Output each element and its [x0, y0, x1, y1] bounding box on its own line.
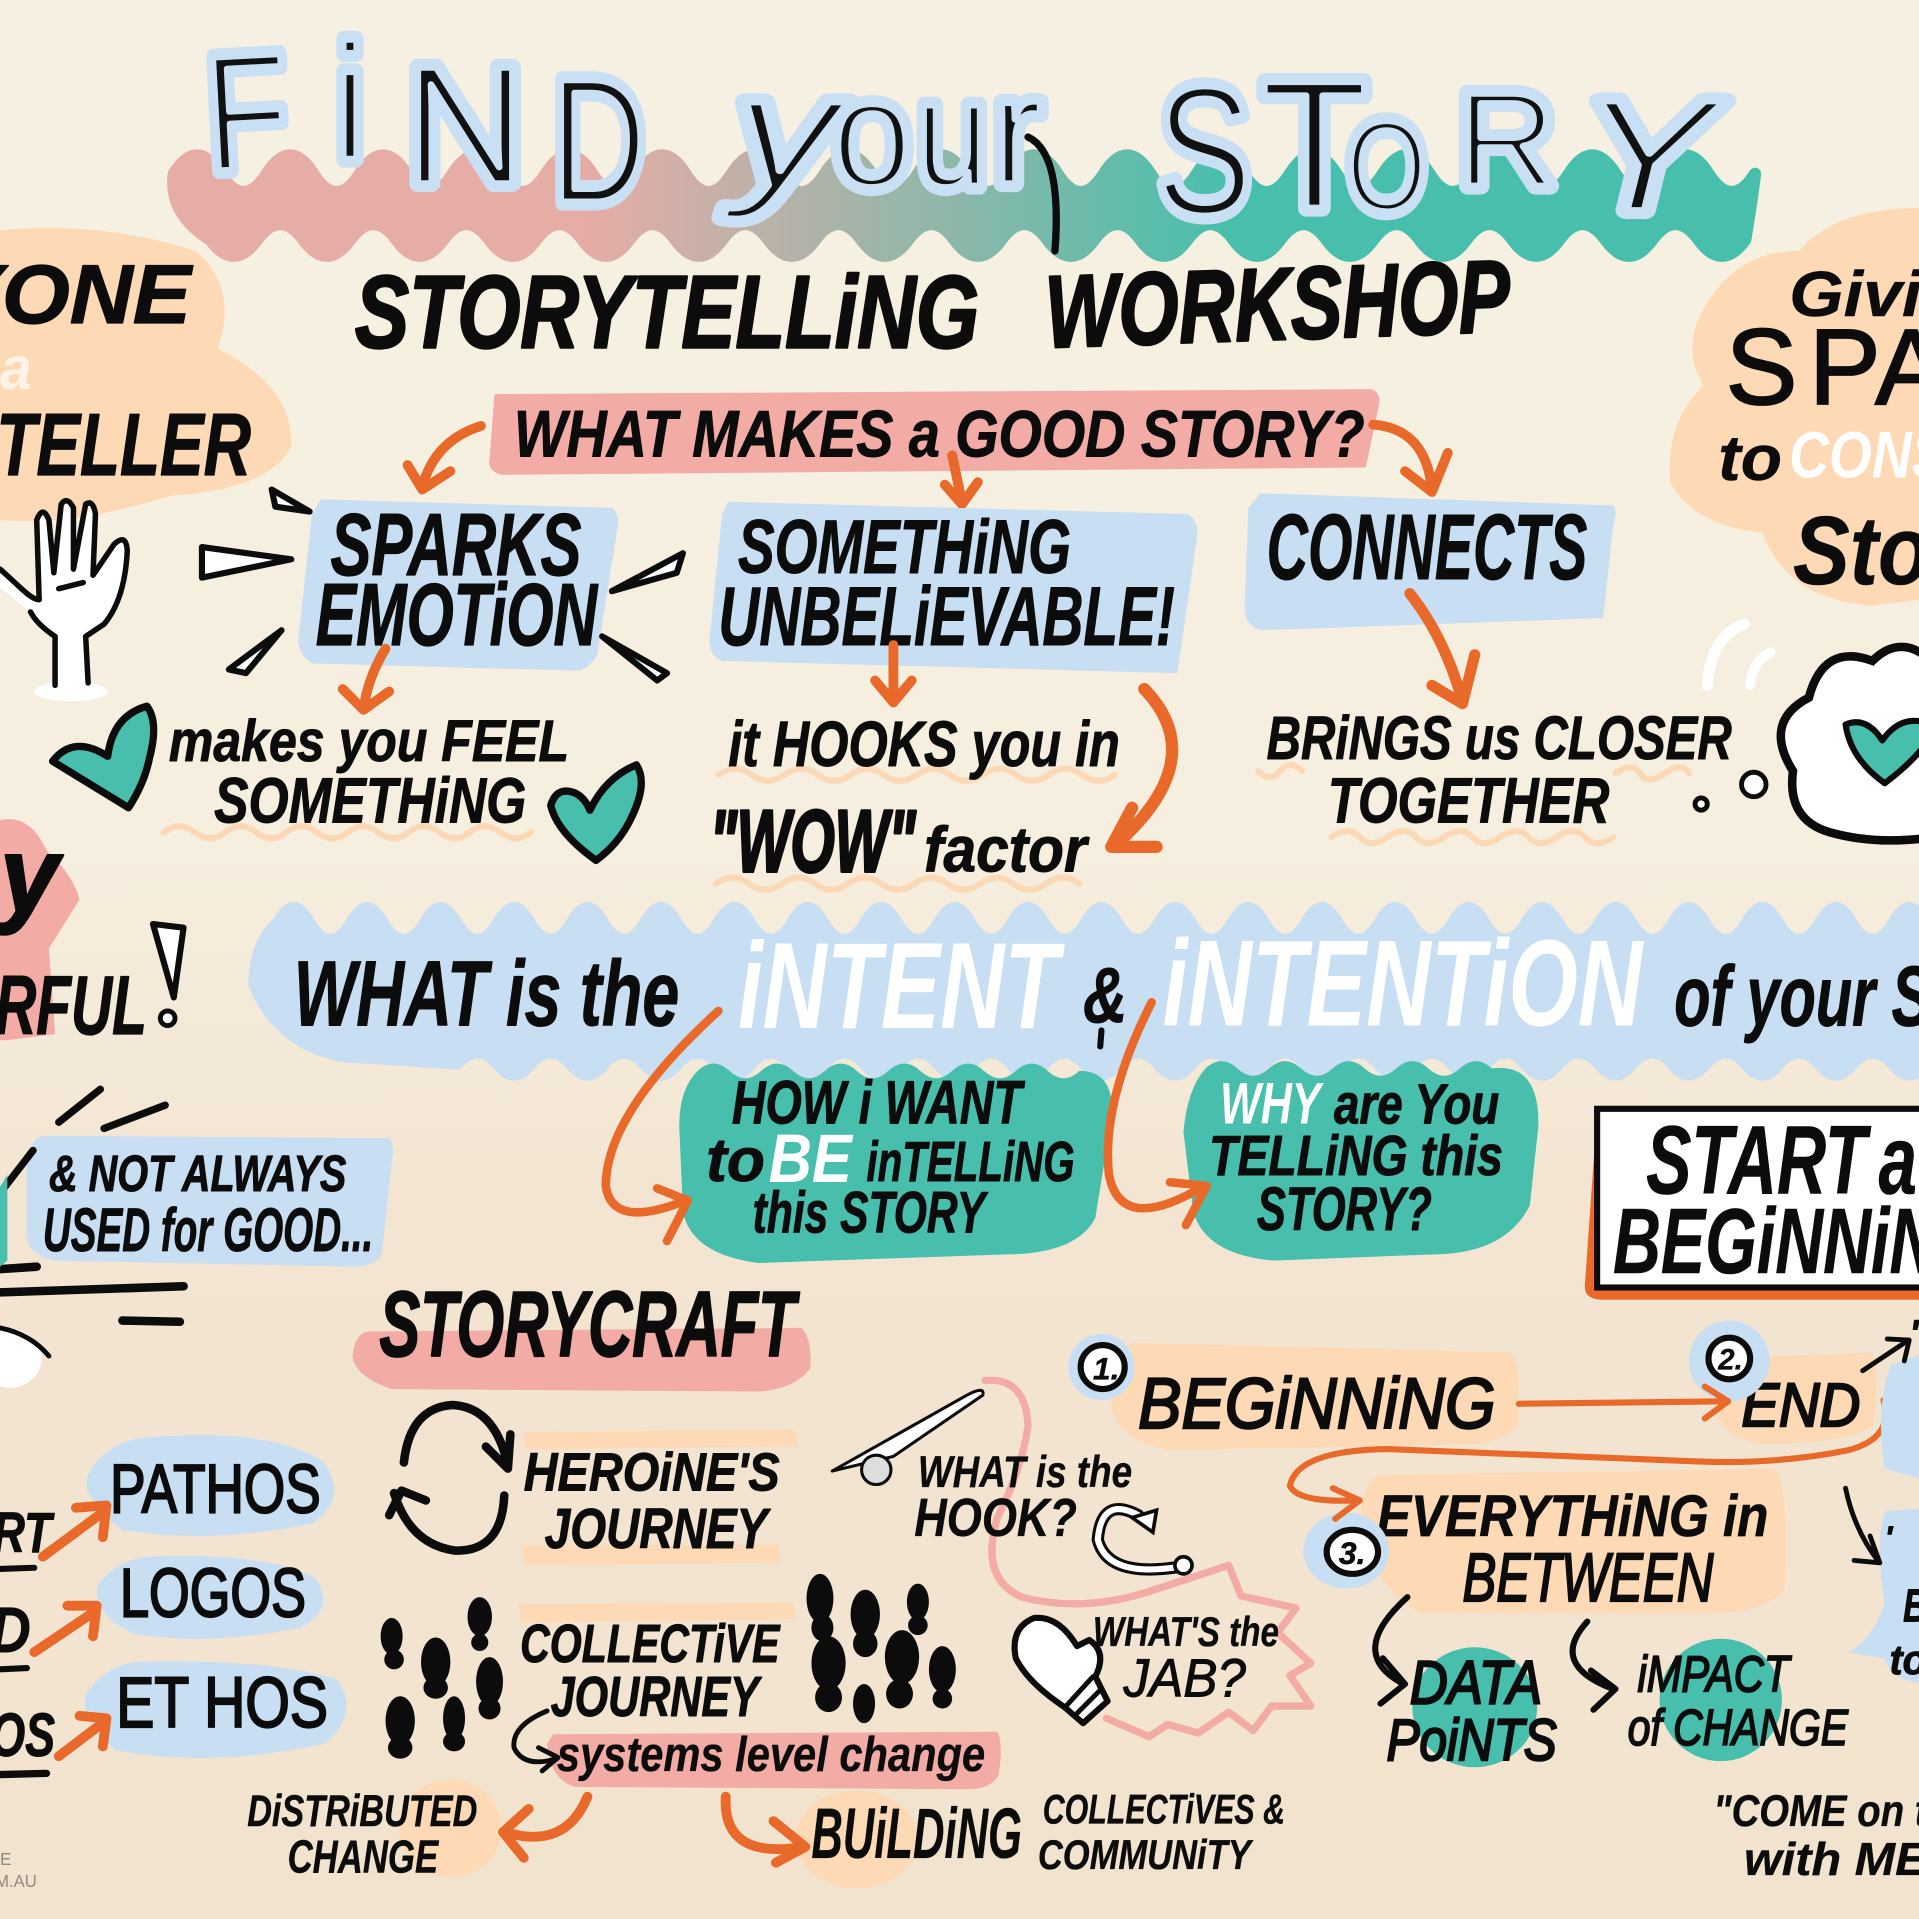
title: r [991, 47, 1043, 217]
panel: connects [1245, 493, 1615, 630]
panel: end [1715, 1352, 1877, 1444]
arrow [875, 645, 912, 702]
text: wow factor: factor [924, 814, 1090, 885]
text: it hooks you in: it HOOKS you in [728, 709, 1120, 780]
text: come on the journey with me: with ME [1744, 1833, 1919, 1885]
text: makes you feel something: SOMETHiNG [214, 765, 526, 836]
panel: not always used for good [27, 1136, 393, 1267]
panel: why are you: STORY? [1257, 1175, 1432, 1243]
panel: logos: LOGOS [120, 1555, 306, 1632]
title: i [334, 10, 366, 195]
panel: beginning [1111, 1343, 1519, 1450]
text: what's the jab: JAB? [1123, 1648, 1246, 1708]
icon: footprints left [381, 1597, 503, 1759]
arrows from question [408, 425, 1448, 504]
panel: everyone a storyteller: a [0, 334, 32, 402]
subtitle [355, 238, 1512, 370]
title: o [832, 49, 912, 219]
title: D [551, 41, 646, 240]
panel: everything in between [1361, 1469, 1786, 1616]
text: makes you feel something: makes you FEEL [169, 709, 569, 774]
icon: fishing rod [832, 1390, 983, 1485]
badge: 3 [1303, 1513, 1389, 1589]
text: start at the beginning [1585, 1104, 1919, 1300]
title: O [1346, 96, 1427, 239]
panel: how i want: to [706, 1126, 765, 1194]
panel: what is the intent band [251, 904, 1919, 1078]
panel: pathos: PATHOS [110, 1451, 321, 1528]
text: wow factor: "WOW" [710, 791, 916, 890]
text: brings us closer together: TOGETHER [1328, 765, 1609, 836]
text: distributed change: DiSTRiBUTED [247, 1787, 477, 1836]
icon: thought bubble with heart [1695, 624, 1919, 840]
text: collective journey [519, 1602, 796, 1728]
panel: everyone a storyteller [0, 228, 291, 521]
text: brings us closer together [1258, 704, 1732, 843]
text: what is the hook: HOOK? [914, 1488, 1077, 1548]
title: R [1456, 64, 1557, 215]
panel: what is the intent band: iNTENTiON [1163, 915, 1644, 1052]
arrow: end loop to everything [1290, 1400, 1886, 1519]
title: r [991, 47, 1043, 217]
panel: everything in between: EVERYTHiNG in [1377, 1484, 1768, 1549]
credit: E [0, 1849, 11, 1869]
arrow [1410, 594, 1475, 704]
arrows to pathos logos ethos [34, 1505, 106, 1756]
panel: pathos [87, 1435, 334, 1536]
panel: beginning: BEGiNNiNG [1138, 1365, 1496, 1444]
badge: 3: 3. [1339, 1535, 1365, 1571]
arrows under between [1375, 1597, 1615, 1710]
title: O [1346, 96, 1427, 239]
text: building [796, 1790, 1022, 1888]
arrow [606, 1011, 718, 1241]
arrow [1108, 1002, 1207, 1225]
text: makes you feel something [164, 709, 569, 838]
text: left clipped labels [0, 1501, 55, 1775]
pink connector line and jab burst [985, 1380, 1311, 1737]
data points: DATA [1410, 1649, 1542, 1717]
panel: sparks emotion [299, 495, 618, 671]
title: F [200, 18, 293, 207]
title: N [404, 31, 526, 220]
panel: what is the intent band: iNTENT [738, 917, 1065, 1054]
subtitle: STORYTELLiNG [355, 255, 979, 370]
text: what is the hook [914, 1448, 1132, 1548]
icon: circular journey arrows [389, 1405, 510, 1551]
arrow: beginning to end [1519, 1387, 1728, 1418]
data points: PoiNTS [1387, 1708, 1557, 1773]
icon: emphasis spikes [202, 490, 683, 680]
panel: how i want: BE [769, 1120, 854, 1197]
data points [1387, 1647, 1557, 1773]
text: heroine's journey: JOURNEY [545, 1497, 771, 1560]
panel: giving space [1670, 208, 1919, 606]
panel: what is the intent band: WHAT is the [294, 942, 679, 1046]
title band [173, 155, 1755, 256]
arrow: curved to wow [1111, 689, 1172, 847]
panel: something unbelievable [709, 502, 1197, 673]
text: distributed change: CHANGE [288, 1830, 440, 1882]
panel: how i want [679, 1064, 1112, 1263]
title: F [200, 18, 293, 207]
panel: why are you: are You [1334, 1072, 1499, 1135]
text: what's the jab: WHAT'S the [1093, 1608, 1279, 1655]
text: what's the jab [1093, 1608, 1279, 1708]
icon: footprints right [807, 1574, 956, 1723]
text: heroine's journey: HEROiNE'S [524, 1443, 780, 1503]
panel: powerful fragment: y [0, 815, 64, 935]
text: heroine's journey [523, 1429, 798, 1565]
title: u [915, 49, 989, 219]
icon: boxing glove [1015, 1618, 1108, 1723]
panel: something unbelievable: UNBELiEVABLE! [718, 570, 1175, 663]
title: Y [1579, 67, 1726, 245]
panel: not always used for good: USED for GOOD... [43, 1196, 373, 1264]
panel: not always used for good: & NOT ALWAYS [49, 1144, 346, 1202]
icon: heart right [551, 765, 641, 860]
badge: 1: 1. [1093, 1350, 1119, 1386]
panel: something unbelievable: SOMETHiNG [738, 505, 1071, 590]
panel: what makes a good story: WHAT MAKES a GOOD STORY? [514, 397, 1365, 471]
text: collective journey: JOURNEY [551, 1665, 762, 1728]
heading: storycraft [352, 1272, 811, 1392]
panel: everything in between: BETWEEN [1463, 1539, 1714, 1616]
title: T [1261, 42, 1368, 247]
right blue bubbles [1848, 1313, 1919, 1683]
panel: why are you: TELLiNG this [1209, 1124, 1503, 1187]
impact of change: iMPACT [1638, 1644, 1792, 1702]
title: i [334, 10, 366, 195]
panel: end: END [1742, 1371, 1860, 1439]
panel: systems level change: systems level change [557, 1728, 985, 1782]
text: collectives and community: COLLECTiVES & [1043, 1786, 1285, 1833]
text: what is the hook: WHAT is the [918, 1448, 1132, 1497]
panel: powerful fragment: RFUL [0, 959, 147, 1052]
text: collective journey: COLLECTiVE [520, 1614, 781, 1674]
panel: powerful fragment [0, 815, 184, 1052]
panel: ethos: ET HOS [116, 1664, 328, 1743]
text: building: BUiLDiNG [811, 1795, 1022, 1874]
impact of change: of CHANGE [1628, 1698, 1849, 1756]
title: o [832, 49, 912, 219]
arrows right [1846, 1339, 1909, 1563]
panel: connects: CONNECTS [1267, 495, 1587, 599]
panel: why are you [1183, 1061, 1538, 1261]
text: brings us closer together: BRiNGS us CLOSER [1267, 704, 1732, 772]
panel: sparks emotion: SPARKS [330, 495, 581, 594]
heading: storycraft: STORYCRAFT [379, 1272, 800, 1376]
subtitle: WORKSHOP [1043, 238, 1512, 370]
right blue bubbles: ' [1885, 1519, 1894, 1555]
title: S [1157, 48, 1252, 253]
title: S [1157, 48, 1252, 253]
arrow [726, 1797, 805, 1863]
panel: everyone a storyteller: TELLER [0, 395, 251, 494]
icon: megaphone lines [0, 1089, 184, 1388]
arrow: journey to systems [514, 1711, 558, 1771]
badge: 1 [1068, 1334, 1135, 1400]
title: N [404, 31, 526, 220]
badge: 2: 2. [1717, 1343, 1743, 1376]
text: collectives and community: COMMUNiTY [1038, 1831, 1253, 1878]
panel: sparks emotion: EMOTiON [316, 565, 599, 664]
panel: giving space: to [1718, 423, 1782, 494]
impact of change [1628, 1639, 1849, 1761]
panel: how i want: this STORY [753, 1180, 989, 1245]
title: T [1261, 42, 1368, 247]
title: D [551, 41, 646, 240]
panel: how i want: inTELLiNG [866, 1130, 1075, 1193]
panel: giving space: Givi [1789, 259, 1919, 330]
title: R [1456, 64, 1557, 215]
panel: what is the intent band: & [1083, 951, 1127, 1039]
text: distributed change [247, 1779, 502, 1882]
badge: 2 [1689, 1321, 1770, 1401]
title: y [721, 42, 849, 220]
title: y [721, 42, 849, 220]
panel: why are you: WHY [1220, 1071, 1324, 1136]
panel: ethos [85, 1661, 346, 1758]
arrow [343, 649, 389, 710]
icon: hook [1098, 1509, 1192, 1574]
text: collectives and community [1038, 1786, 1285, 1878]
credit [0, 1849, 37, 1891]
panel: how i want: HOW i WANT [732, 1068, 1025, 1136]
arrow [503, 1797, 587, 1858]
text: come on the journey with me [1713, 1787, 1919, 1885]
title: Y [1579, 67, 1726, 245]
icon: heart left [53, 706, 154, 808]
icon: raised hand [0, 501, 127, 701]
title: u [915, 49, 989, 219]
title [200, 10, 1726, 253]
